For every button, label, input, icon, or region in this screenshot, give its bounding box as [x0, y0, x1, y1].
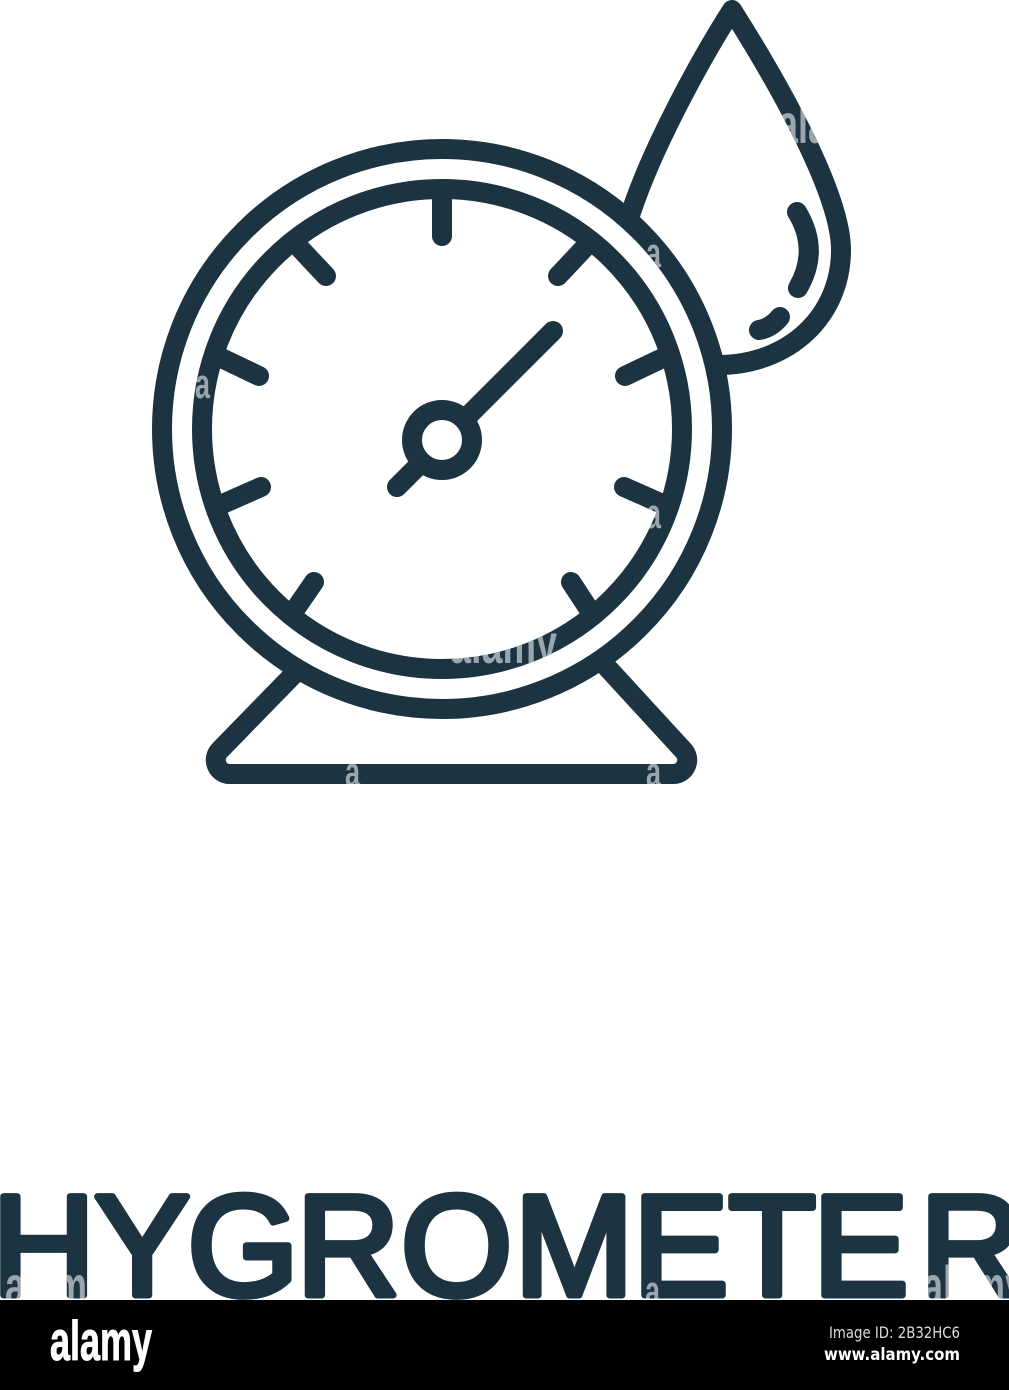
icon: hygrometer [162, 10, 841, 774]
image id: Image ID: 2B32HC6 [829, 1323, 960, 1342]
icon: outer ring [162, 149, 722, 709]
icon: water drop [628, 10, 841, 365]
icon: dial tick marks [215, 195, 669, 614]
watermark fragments: a [645, 1267, 660, 1314]
icon: stand [216, 664, 687, 774]
watermark fragments: alamy [5, 1254, 107, 1317]
watermark fragments: a [345, 748, 360, 795]
watermark fragments: a [646, 490, 661, 537]
website: www.alamy.com [824, 1345, 960, 1365]
watermark fragments: a [646, 229, 661, 276]
watermark fragments: alamy [778, 92, 880, 155]
watermark fragments: alamy [450, 612, 557, 675]
title: HYGROMETER [0, 1167, 1009, 1326]
icon: needle [397, 331, 553, 487]
logo: alamy: alamy [50, 1309, 152, 1372]
watermark fragments: a [646, 748, 661, 795]
watermark fragments: a [195, 360, 210, 407]
footer bar [0, 1300, 1009, 1390]
icon: inner dial ring [202, 189, 682, 669]
